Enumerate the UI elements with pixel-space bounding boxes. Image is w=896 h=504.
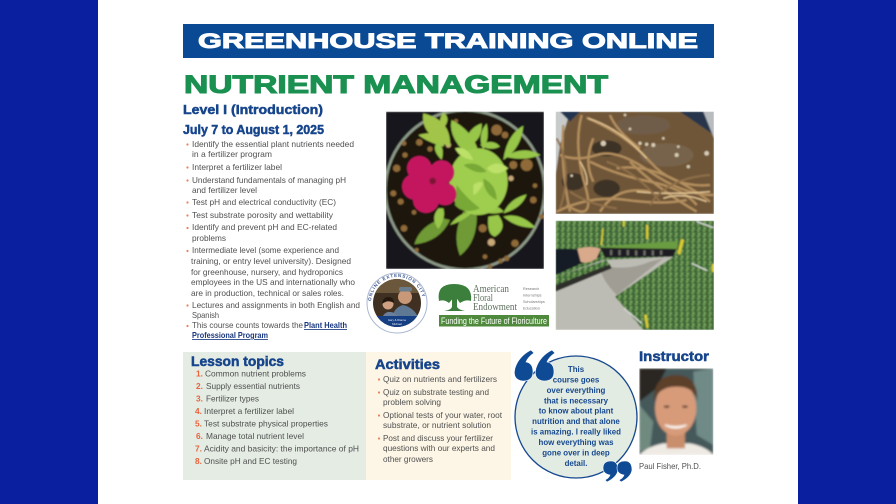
panel: lesson topics: Common nutrient problems bbox=[205, 368, 306, 378]
panel: lesson topics: 6. bbox=[196, 431, 203, 441]
course bullet list: Identify and prevent pH and EC-related bbox=[192, 222, 337, 232]
callout: testimonial quote: nutrition and that alone bbox=[532, 417, 620, 426]
course bullet list: Professional Program bbox=[192, 330, 268, 340]
course bullet list: problems bbox=[192, 233, 226, 243]
callout: testimonial quote: This bbox=[568, 365, 585, 374]
course bullet list bbox=[186, 139, 360, 340]
photo: instructor portrait bbox=[639, 368, 713, 455]
course bullet list: This course counts towards the bbox=[192, 320, 303, 330]
panel: lesson topics: Acidity and basicity: the importance of pH bbox=[204, 444, 359, 454]
callout: testimonial quote: gone over in deep bbox=[542, 448, 610, 458]
logo: American Floral Endowment: Endowment bbox=[473, 301, 517, 313]
icon: opening quote mark bbox=[514, 350, 555, 381]
course bullet list: and fertilizer level bbox=[192, 185, 257, 195]
logo: American Floral Endowment: American bbox=[473, 283, 509, 295]
course bullet list: Test pH and electrical conductivity (EC) bbox=[192, 197, 336, 207]
panel: lesson topics: 8. bbox=[195, 456, 202, 466]
course bullet list: Interpret a fertilizer label bbox=[192, 162, 282, 172]
panel: activities: Post and discuss your fertilizer bbox=[383, 433, 493, 443]
panel: lesson topics: 2. bbox=[196, 381, 203, 391]
logo: American Floral Endowment: Floral bbox=[473, 292, 493, 304]
course bullet list: Plant Health bbox=[304, 320, 347, 330]
panel: lesson topics: 1. bbox=[196, 368, 203, 378]
white page panel bbox=[98, 0, 798, 504]
callout: testimonial quote: to know about plant bbox=[539, 406, 614, 416]
panel: lesson topics: 7. bbox=[195, 444, 202, 454]
course bullet list: Intermediate level (some experience and bbox=[192, 245, 339, 255]
callout: testimonial quote: over everything bbox=[547, 386, 606, 395]
logo: American Floral Endowment bbox=[439, 283, 549, 326]
callout: testimonial quote: that is necessary bbox=[544, 396, 609, 406]
panel: lesson topics: Fertilizer types bbox=[206, 394, 259, 404]
course bullet list: Understand fundamentals of managing pH bbox=[192, 175, 346, 185]
panel: lesson topics: Interpret a fertilizer label bbox=[204, 406, 294, 416]
logo: online extension city: Gary & Dianne bbox=[388, 318, 407, 322]
instructor heading: Instructor bbox=[639, 349, 710, 364]
level heading: Level I (Introduction) bbox=[183, 102, 323, 117]
dates heading: July 7 to August 1, 2025 bbox=[183, 122, 324, 137]
course bullet list: training, or entry level university). Designed bbox=[191, 256, 351, 266]
photo: root ball bbox=[556, 112, 714, 214]
panel: lesson topics: 5. bbox=[195, 418, 202, 428]
callout: testimonial quote: is amazing. I really liked bbox=[531, 428, 621, 436]
panel: lesson topics: Onsite pH and EC testing bbox=[204, 456, 297, 466]
panel: activities: substrate, or nutrient solution bbox=[383, 420, 491, 430]
logo: American Floral Endowment: Research bbox=[523, 287, 539, 291]
course bullet list: Lectures and assignments in both English and bbox=[192, 300, 360, 310]
icon: tree bbox=[439, 284, 471, 311]
pink flower bbox=[402, 156, 456, 213]
course bullet list: Spanish bbox=[192, 310, 219, 320]
photo: petunia in pot bbox=[384, 109, 546, 271]
course bullet list: in a fertilizer program bbox=[192, 149, 272, 159]
panel: activities: questions with our experts and bbox=[383, 443, 495, 453]
header banner: GREENHOUSE TRAINING ONLINE bbox=[198, 29, 698, 53]
logo: American Floral Endowment: Funding the Future of Floriculture bbox=[441, 316, 547, 326]
logo: American Floral Endowment: Scholarships bbox=[523, 300, 545, 304]
logo: online extension city: ONLINE EXTENSION CITY bbox=[368, 274, 426, 301]
panel: activities: Quiz on nutrients and fertilizers bbox=[383, 374, 497, 384]
panel: lesson topics: Test substrate physical properties bbox=[204, 418, 328, 428]
title: NUTRIENT MANAGEMENT bbox=[184, 71, 608, 99]
panel: lesson topics: Lesson topics bbox=[191, 354, 284, 369]
instructor caption: Paul Fisher, Ph.D. bbox=[639, 461, 701, 471]
logo: online extension city bbox=[366, 272, 428, 334]
panel: activities: problem solving bbox=[383, 397, 441, 407]
course bullet list: employees in the US and internationally who bbox=[191, 277, 355, 287]
course bullet list: Test substrate porosity and wettability bbox=[192, 210, 334, 220]
callout: testimonial quote: how everything was bbox=[539, 438, 614, 447]
panel: lesson topics: 3. bbox=[196, 394, 203, 404]
panel: activities: Activities bbox=[375, 357, 440, 372]
panel: lesson topics bbox=[183, 352, 366, 480]
callout: testimonial quote bbox=[514, 350, 637, 482]
course bullet list: for greenhouse, nursery, and hydroponics bbox=[191, 267, 343, 277]
panel: lesson topics: Supply essential nutrients bbox=[206, 381, 300, 391]
callout: testimonial quote: course goes bbox=[553, 376, 600, 384]
panel: activities: Quiz on substrate testing and bbox=[383, 387, 489, 397]
logo: online extension city: Michael bbox=[392, 322, 402, 326]
header banner bbox=[183, 24, 714, 58]
logo: American Floral Endowment: Education bbox=[523, 306, 540, 310]
course bullet list: Identify the essential plant nutrients needed bbox=[192, 139, 354, 149]
panel: activities bbox=[366, 352, 511, 480]
panel: activities: Optional tests of your water, root bbox=[383, 410, 503, 420]
panel: lesson topics: Manage total nutrient level bbox=[206, 431, 304, 441]
logo: American Floral Endowment: Internships bbox=[523, 294, 542, 298]
callout: testimonial quote: detail. bbox=[565, 459, 587, 468]
course bullet list: are in production, technical or sales roles. bbox=[191, 288, 344, 298]
panel: lesson topics: 4. bbox=[195, 406, 202, 416]
photo: plug trays bbox=[556, 221, 714, 330]
icon: closing quote mark bbox=[603, 461, 632, 482]
panel: activities: other growers bbox=[383, 454, 433, 464]
